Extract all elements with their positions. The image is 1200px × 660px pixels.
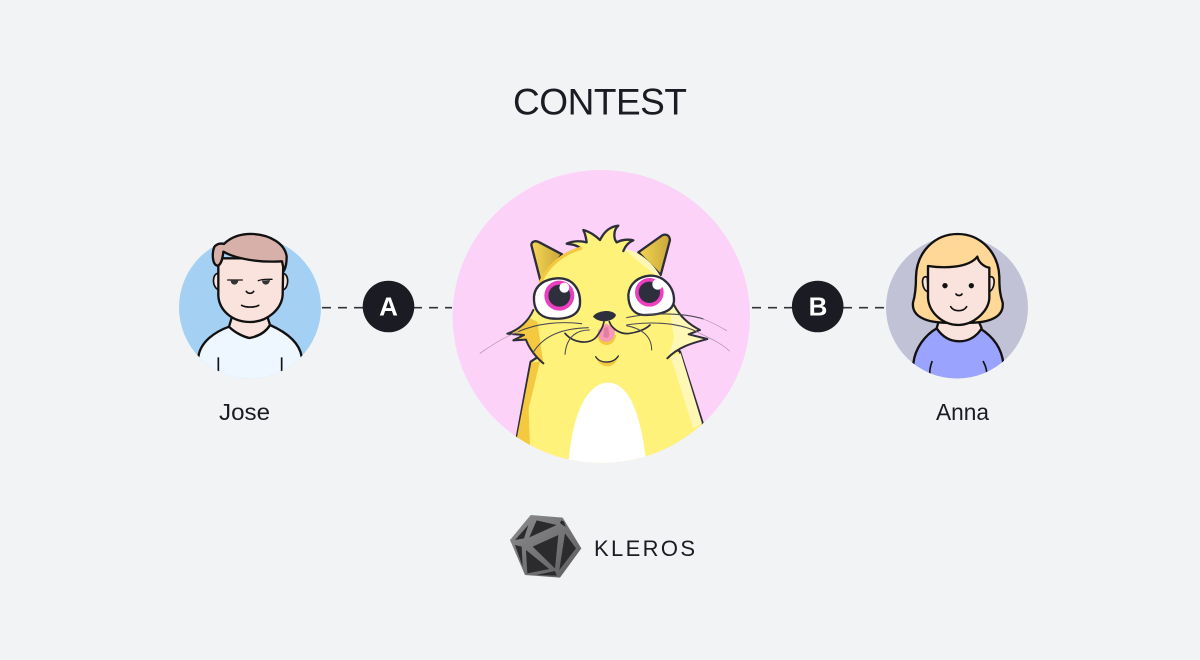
avatar: Jose <box>179 234 321 393</box>
label: Anna: Anna <box>936 399 989 425</box>
badge A: A <box>379 292 398 322</box>
badge B <box>792 281 844 332</box>
icon: Kleros logo <box>510 515 581 578</box>
ears <box>531 241 562 282</box>
badge B: B <box>809 292 827 322</box>
cat avatar <box>453 170 750 485</box>
head <box>512 227 684 356</box>
mouth and nose <box>597 335 616 345</box>
label: Jose: Jose <box>219 399 270 425</box>
connector: Jose to A to cat <box>322 307 452 309</box>
avatar: Anna <box>886 234 1028 393</box>
eyes <box>534 278 580 319</box>
connector: cat to B to Anna <box>752 307 885 309</box>
badge A <box>363 281 414 332</box>
fur outline <box>507 310 543 363</box>
whiskers <box>480 314 729 354</box>
wordmark: KLEROS: KLEROS <box>594 536 695 561</box>
body <box>516 350 704 463</box>
chest <box>568 383 647 465</box>
title: CONTEST <box>513 82 687 122</box>
